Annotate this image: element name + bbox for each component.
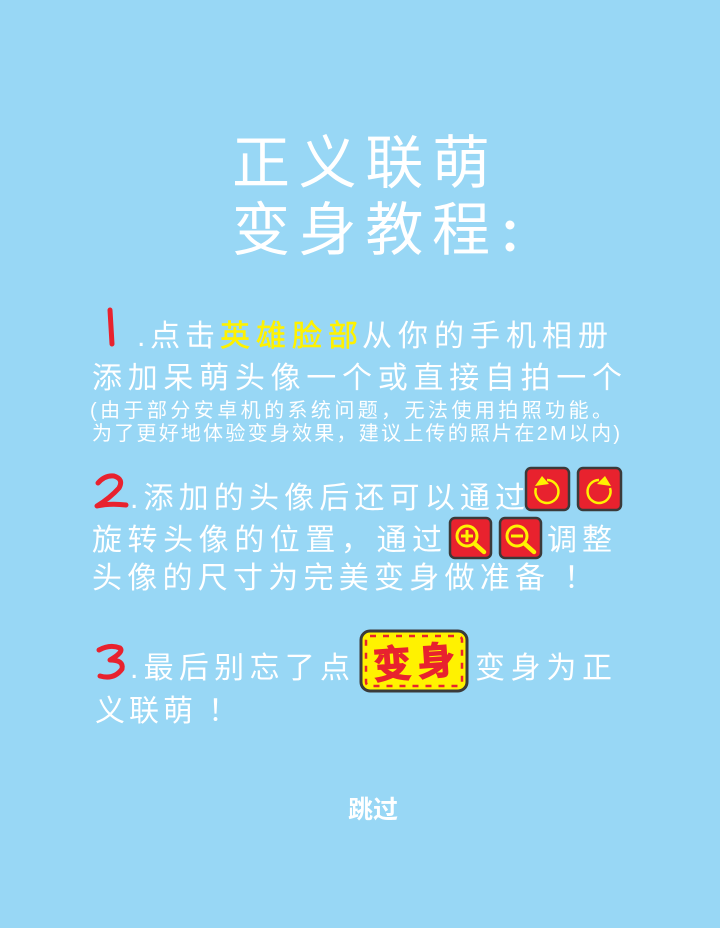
step 3 text: 变身为正	[475, 652, 612, 685]
step 1 first line: 添加呆萌头像一个或直接自拍一个	[92, 362, 622, 395]
step 1 first line	[92, 320, 622, 395]
step 3 text: ！	[208, 695, 238, 728]
icon: rotate right button	[578, 468, 621, 510]
step 3 text: .最后别忘了点	[130, 652, 350, 685]
step 1 note	[90, 399, 620, 445]
title: 变身教程	[232, 198, 490, 263]
icon: transform button	[361, 631, 467, 691]
title	[232, 131, 514, 263]
step 1 first line: 英雄脸部	[220, 320, 358, 353]
step 1 note: 为了更好地体验变身效果，建议上传的照片在2M以内)	[92, 422, 620, 445]
step 1 first line: 从你的手机相册	[362, 320, 608, 353]
step 2 text: 调整	[547, 524, 612, 557]
step number 2	[97, 476, 126, 506]
step 3 text	[95, 646, 612, 728]
icon: transform button: 变身	[372, 640, 457, 688]
icon: zoom in button	[450, 518, 491, 558]
step 2 text	[92, 476, 612, 595]
icon: rotate left button	[526, 468, 569, 510]
step 3 text: 义联萌	[95, 695, 193, 728]
skip link: 跳过	[348, 796, 398, 824]
step 2 text: 头像的尺寸为完美变身做准备	[92, 562, 545, 595]
step 2 text: ！	[564, 562, 594, 595]
step number 1	[110, 310, 112, 344]
step 1 note: (由于部分安卓机的系统问题，无法使用拍照功能。	[90, 399, 612, 422]
step 1 text	[90, 310, 622, 445]
title: 正义联萌	[232, 131, 490, 196]
step 2 text: 旋转头像的位置，通过	[92, 524, 442, 557]
step 2 text: .添加的头像后还可以通过	[130, 482, 525, 515]
icon: zoom out button	[500, 518, 541, 558]
step number 3	[99, 646, 122, 677]
step 1 first line: .点击	[137, 320, 215, 353]
